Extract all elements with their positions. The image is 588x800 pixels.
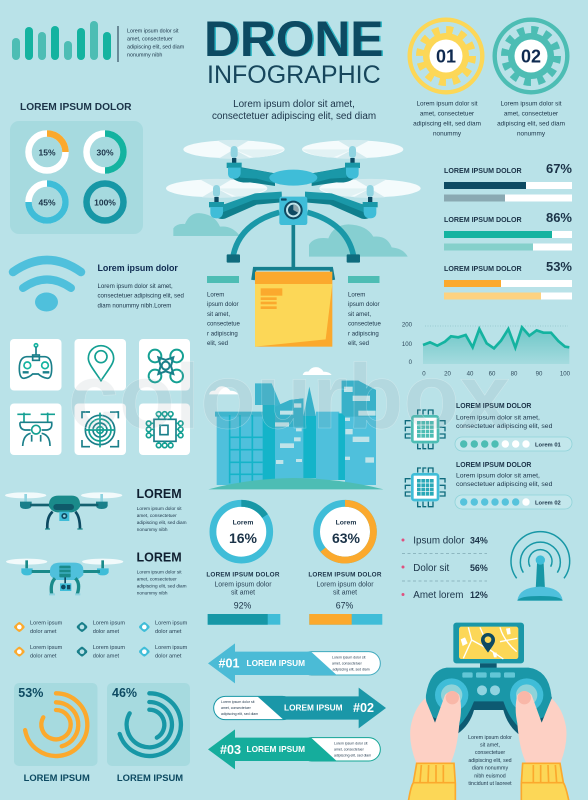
donut chart 63% caption: 67% (336, 600, 353, 610)
percent list: Amet lorem (413, 590, 463, 601)
subtitle: Lorem ipsum dolor sit amet, (233, 99, 355, 110)
percent list: Dolor sit (413, 563, 450, 574)
radial panel 53% (14, 683, 98, 783)
arrow #01: LOREM IPSUM (246, 658, 305, 668)
small drone light text: LOREM (136, 550, 182, 564)
donut chart 16% (213, 503, 270, 560)
illustration: delivery drone with parcel (166, 140, 421, 347)
legend bullets: dolor amet (30, 629, 57, 635)
percent list: Ipsum dolor (413, 536, 465, 547)
arrow #02: LOREM IPSUM (284, 702, 343, 712)
percent list (402, 536, 488, 601)
icon: signal antenna (511, 532, 570, 601)
sleeve left (408, 763, 455, 800)
legend bullets: dolor amet (155, 629, 182, 635)
drone right half (302, 140, 421, 263)
legend bullets: Lorem ipsum (93, 620, 125, 626)
small drone light text: amet, consectetuer (137, 576, 177, 582)
chip row 2 (405, 462, 572, 509)
gear 02 caption: Lorem ipsum dolor sit (500, 100, 562, 108)
controller neck (480, 663, 497, 669)
legend bullets: dolor amet (30, 654, 57, 660)
chip row 2: Lorem ipsum dolor sit amet, (456, 472, 540, 480)
area chart: 80 (511, 370, 518, 378)
caption: Lorem ipsum dolor sit (127, 28, 179, 34)
arrow #03: amet, consectetuer (334, 748, 365, 752)
donut panel heading: LOREM IPSUM DOLOR (20, 102, 132, 113)
arrow #01: Lorem ipsum dolor sit (332, 656, 365, 660)
icon: gamepad (19, 344, 52, 378)
legend bullets: dolor amet (93, 654, 120, 660)
left parcel note: consectetue (207, 321, 240, 328)
legend markers (14, 622, 150, 657)
donut 45%: 45% (38, 198, 56, 208)
area chart (402, 322, 571, 378)
radial panel 53%: LOREM IPSUM (24, 772, 90, 783)
area chart: 0 (409, 359, 413, 366)
title: INFOGRAPHIC (207, 61, 381, 89)
arrow #01: #01 (218, 656, 240, 670)
sleeve right (521, 763, 569, 800)
arrow #03: Lorem ipsum dolor sit (334, 742, 367, 746)
donut chart 63% caption: sit amet (333, 590, 357, 596)
radial panel 46%: LOREM IPSUM (117, 772, 183, 783)
progress bars group 53%: 53% (546, 259, 572, 274)
gear 01 caption: adipiscing elit, sed diam (413, 120, 481, 128)
radial panel 53%: 53% (18, 686, 43, 700)
gear 02 caption: amet, consectetuer (504, 110, 559, 118)
controller caption: consectetuer (475, 750, 505, 756)
progress bars group 86%: LOREM IPSUM DOLOR (444, 216, 522, 224)
drone body (269, 170, 317, 186)
controller screen (453, 623, 524, 663)
donut chart 63% (317, 503, 373, 560)
donut chart 16% caption: 92% (234, 600, 251, 610)
title: DRONE (206, 11, 385, 67)
left parcel note (207, 276, 240, 347)
icon: drone outline (17, 413, 55, 446)
arrow #03: LOREM IPSUM (246, 744, 305, 754)
donut chart 63% caption: Lorem ipsum dolor (316, 582, 374, 588)
cloud left (173, 213, 240, 236)
gear 01 (410, 20, 482, 92)
donut chart 63%: 63% (332, 530, 361, 546)
watermark: colourbox (68, 346, 510, 448)
progress bars group 67%: 67% (546, 161, 572, 176)
legend bullets: Lorem ipsum (155, 645, 188, 651)
controller caption: sit amet, (480, 742, 500, 748)
left parcel note: elit, sed (207, 340, 228, 347)
small drone dark text (136, 487, 187, 532)
legend bullets: Lorem ipsum (30, 645, 63, 651)
donut 15%: 15% (38, 148, 56, 158)
gear 02 (495, 20, 567, 92)
legend bullets: dolor amet (155, 654, 182, 660)
hand right (516, 691, 567, 764)
icon: target (82, 412, 118, 447)
wifi text block (98, 263, 184, 309)
donut 100%: 100% (94, 198, 116, 208)
donut chart 63%: Lorem (336, 520, 356, 526)
donut chart 16%: Lorem (233, 520, 253, 526)
right parcel note: sit amet, (348, 311, 371, 318)
area chart: 100 (560, 370, 571, 378)
right parcel note (348, 276, 381, 347)
controller caption: adipiscing elit, sed (468, 758, 512, 764)
subtitle: consectetuer adipiscing elit, sed diam (212, 111, 376, 122)
parcel (255, 272, 332, 347)
small drone light (6, 559, 123, 594)
illustration: hands holding remote controller (408, 623, 569, 800)
arrow #03: #03 (220, 743, 241, 757)
gear 02 caption: nonummy (517, 130, 546, 138)
icon: map pin (88, 346, 114, 381)
small drone dark (5, 492, 122, 529)
wifi text block: Lorem ipsum dolor (98, 263, 178, 273)
donut 30%: 30% (96, 148, 114, 158)
right parcel note: Lorem (348, 292, 365, 298)
arrow #01: adipiscing elit, sed diam (332, 668, 370, 672)
left parcel note: r adipiscing (207, 330, 238, 337)
percent list: 12% (470, 590, 488, 600)
small drone dark text: Lorem ipsum dolor sit (137, 506, 182, 511)
arrow #02: amet, consectetuer (221, 706, 252, 710)
gear 01 caption: amet, consectetuer (420, 110, 475, 118)
hand left (410, 691, 461, 764)
percent list: 56% (470, 563, 488, 573)
icon: chip blue (405, 468, 445, 507)
donut chart 16% caption: LOREM IPSUM DOLOR (206, 572, 280, 578)
chip row 2: Lorem 02 (535, 500, 561, 506)
icon: quadcopter (149, 350, 183, 382)
small drone dark text: LOREM (136, 487, 182, 501)
progress bars group 67%: LOREM IPSUM DOLOR (444, 167, 522, 175)
delivery tether (253, 225, 333, 280)
controller caption: tincidunt ut laoreet (468, 781, 512, 787)
area chart: 40 (467, 370, 474, 378)
arrow #03: adipiscing elit, sed diam (334, 754, 371, 758)
controller caption: diam nonummy (472, 766, 508, 772)
camera (279, 197, 307, 225)
icon: wifi (13, 260, 81, 312)
chip row 1: Lorem ipsum dolor sit amet, (456, 414, 540, 422)
right parcel note: r adipiscing (348, 330, 379, 337)
percent list: 34% (470, 536, 488, 546)
illustration: city skyline (208, 367, 383, 489)
area chart: 20 (444, 370, 451, 378)
caption: adipiscing elit, sed diam (127, 44, 185, 50)
chip row 1: Lorem 01 (535, 442, 562, 448)
donut chart 16% caption: sit amet (231, 590, 255, 596)
icon: chip teal (405, 410, 445, 449)
small drone dark text: adipiscing elit, sed diam (137, 520, 187, 525)
donut chart 16% caption: Lorem ipsum dolor (214, 582, 272, 588)
arrow #02: Lorem ipsum dolor sit (221, 700, 254, 704)
legend bullets: dolor amet (93, 629, 120, 635)
progress bars group 67% (444, 161, 572, 202)
progress bars group 86%: 86% (546, 210, 572, 225)
drone left half (166, 140, 285, 263)
legend bullets: Lorem ipsum (30, 620, 63, 626)
top-left equalizer bars with caption (12, 21, 185, 62)
panel: donut charts (10, 121, 143, 234)
chip row 2: consectetuer adipiscing elit, sed (456, 481, 553, 488)
cloud right (309, 224, 408, 257)
small drone light text: Lorem ipsum dolor sit (137, 570, 182, 574)
progress bars group 86% (444, 210, 572, 250)
controller body (426, 668, 552, 734)
arrow #02: adipiscing elit, sed diam (221, 712, 258, 716)
gear 01: 01 (436, 46, 456, 66)
small drone light text: adipiscing elit, sed diam (137, 584, 187, 588)
progress bars group 53% (444, 259, 572, 300)
gear 02 caption: adipiscing elit, sed diam (497, 120, 565, 128)
arrow #01 (208, 643, 380, 683)
donut chart 63% caption: LOREM IPSUM DOLOR (308, 572, 382, 578)
legend bullets: Lorem ipsum (155, 620, 188, 626)
wifi text block: Lorem ipsum dolor sit amet, (98, 283, 173, 290)
panel: icon grid (10, 339, 190, 455)
small drone dark text: amet, consectetuer (137, 513, 177, 518)
left parcel note: Lorem (207, 292, 224, 298)
left parcel note: ipsum dolor (207, 301, 238, 308)
right parcel note: consectetue (348, 321, 381, 328)
gear 01 caption: nonummy (433, 130, 462, 138)
controller caption: nibh euismod (474, 773, 506, 779)
arrow #03 (208, 729, 380, 769)
chip row 2: LOREM IPSUM DOLOR (456, 462, 531, 469)
radial panel 46% (107, 683, 190, 783)
small drone light text (136, 550, 187, 596)
radial panel 46%: 46% (112, 686, 137, 700)
area chart: 0 (422, 370, 426, 378)
donut chart 16% caption (206, 572, 280, 625)
caption: nonummy nibh (127, 52, 162, 58)
left parcel note: sit amet, (207, 311, 230, 318)
chip row 1 (405, 403, 572, 451)
donut chart 16%: 16% (229, 530, 258, 546)
caption: amet, consectetuer (127, 36, 173, 42)
chip row 1: consectetuer adipiscing elit, sed (456, 423, 553, 430)
legend bullets (14, 620, 188, 660)
donut chart 63% caption (308, 572, 382, 625)
icon: circuit chip (146, 412, 183, 448)
right parcel note: elit, sed (348, 340, 369, 347)
area chart: 200 (402, 322, 413, 328)
gear 02: 02 (521, 46, 541, 66)
right parcel note: ipsum dolor (348, 301, 380, 308)
area chart: 90 (536, 370, 543, 378)
small drone light text: nonummy nibh (137, 590, 168, 596)
arrow #02 (214, 688, 386, 728)
area chart: 60 (489, 370, 496, 378)
wifi text block: diam nonummy nibh.Lorem (98, 302, 171, 309)
controller caption: Lorem ipsum dolor (468, 735, 512, 741)
title: DRONE (204, 11, 383, 67)
area chart: 100 (402, 341, 413, 348)
progress bars group 53%: LOREM IPSUM DOLOR (444, 265, 522, 273)
chip row 1: LOREM IPSUM DOLOR (456, 403, 531, 410)
small clouds (209, 367, 332, 394)
small drone dark text: nonummy nibh (137, 527, 168, 532)
arrow #02: #02 (353, 701, 374, 715)
arrow #01: amet, consectetuer (332, 662, 363, 666)
legend bullets: Lorem ipsum (93, 645, 125, 651)
wifi text block: consectetuer adipiscing elit, sed (98, 293, 184, 300)
gear 01 caption: Lorem ipsum dolor sit (416, 100, 478, 108)
